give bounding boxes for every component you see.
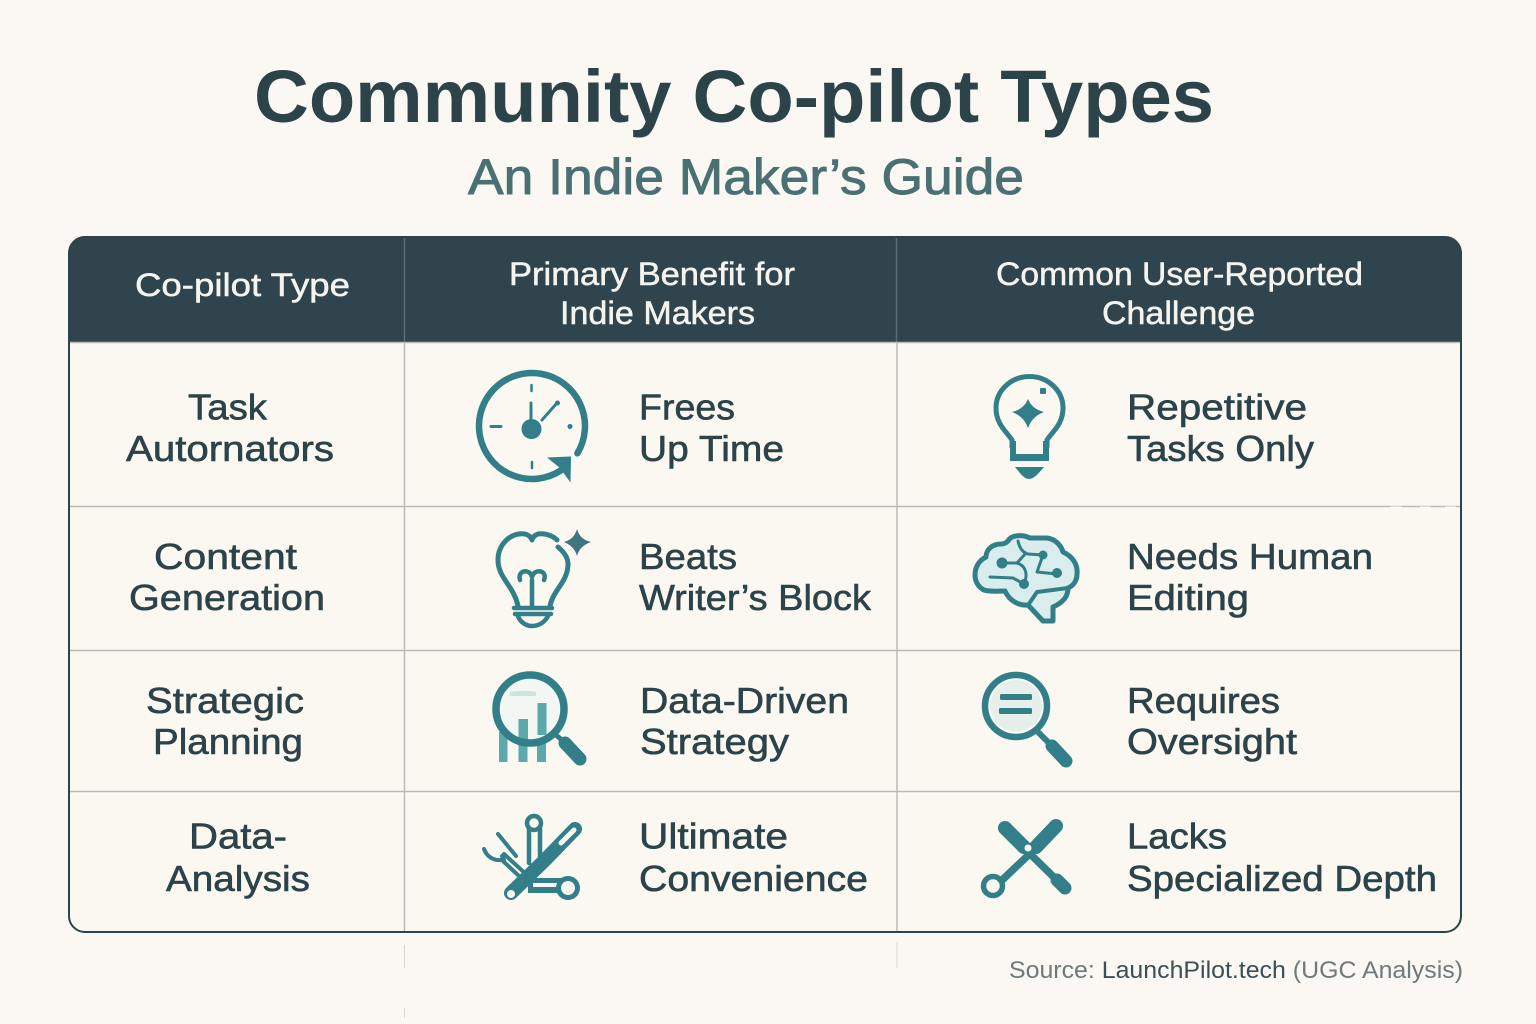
- title: Community Co-pilot Types: [254, 55, 1214, 138]
- challenge text: [1127, 680, 1297, 762]
- type label: [166, 816, 310, 899]
- benefit text: Up Time: [639, 428, 784, 469]
- icon: lightbulb with spark: [996, 377, 1063, 479]
- benefit text: Writer’s Block: [639, 577, 872, 618]
- row 1: task automators: [126, 373, 1314, 482]
- icon: magnifier with lines: [985, 675, 1066, 761]
- challenge text: [1127, 386, 1314, 469]
- column heading: benefit: Primary Benefit for: [509, 256, 795, 292]
- column heading: challenge: [996, 256, 1363, 331]
- benefit text: Ultimate: [639, 816, 788, 856]
- type label: Analysis: [166, 858, 310, 899]
- challenge text: Oversight: [1127, 721, 1297, 762]
- type label: Content: [154, 536, 297, 577]
- icon: magnifier over bar chart: [496, 675, 580, 762]
- type label: Planning: [153, 721, 303, 762]
- column heading: benefit: Indie Makers: [560, 295, 755, 331]
- challenge text: Tasks Only: [1127, 428, 1314, 469]
- benefit text: [639, 816, 868, 899]
- benefit text: [639, 386, 784, 469]
- challenge text: Lacks: [1127, 816, 1227, 856]
- icon: clock with arrow: [479, 373, 585, 482]
- benefit text: Convenience: [639, 858, 868, 899]
- benefit text: Beats: [639, 536, 737, 577]
- challenge text: Editing: [1127, 577, 1249, 618]
- type label: Strategic: [146, 680, 304, 721]
- benefit text: Frees: [639, 386, 735, 428]
- benefit text: Data-Driven: [640, 680, 849, 721]
- column heading: type: Co-pilot Type: [135, 267, 350, 303]
- benefit text: [640, 680, 849, 762]
- type label: Data-: [189, 816, 287, 856]
- benefit text: Strategy: [640, 721, 789, 762]
- type label: Generation: [129, 577, 325, 618]
- icon: crossed tools: [984, 826, 1065, 896]
- subtitle: An Indie Maker’s Guide: [468, 149, 1024, 205]
- icon: brain with circuits: [975, 536, 1077, 621]
- row 4: data analysis: [166, 816, 1437, 899]
- icon: lightbulb with star: [498, 529, 591, 626]
- row 2: content generation: [129, 529, 1373, 626]
- column heading: challenge: Common User-Reported: [996, 256, 1363, 292]
- type label: [126, 386, 334, 469]
- row 3: strategic planning: [146, 675, 1297, 762]
- table body: [69, 237, 1461, 932]
- type label: Autornators: [126, 428, 334, 469]
- benefit text: [639, 536, 872, 618]
- column heading: challenge: Challenge: [1102, 295, 1255, 331]
- column heading: benefit: [509, 256, 795, 331]
- type label: [129, 536, 325, 618]
- challenge text: Repetitive: [1127, 386, 1307, 428]
- challenge text: Requires: [1127, 680, 1280, 721]
- challenge text: Needs Human: [1127, 536, 1373, 577]
- challenge text: [1127, 536, 1373, 618]
- source note: Source: LaunchPilot.tech (UGC Analysis): [1009, 957, 1463, 984]
- type label: [146, 680, 304, 762]
- comparison table: [69, 237, 1461, 932]
- challenge text: Specialized Depth: [1127, 858, 1437, 899]
- challenge text: [1127, 816, 1437, 899]
- icon: multi-tool: [484, 816, 578, 898]
- table header band: [69, 237, 1461, 342]
- type label: Task: [188, 386, 268, 428]
